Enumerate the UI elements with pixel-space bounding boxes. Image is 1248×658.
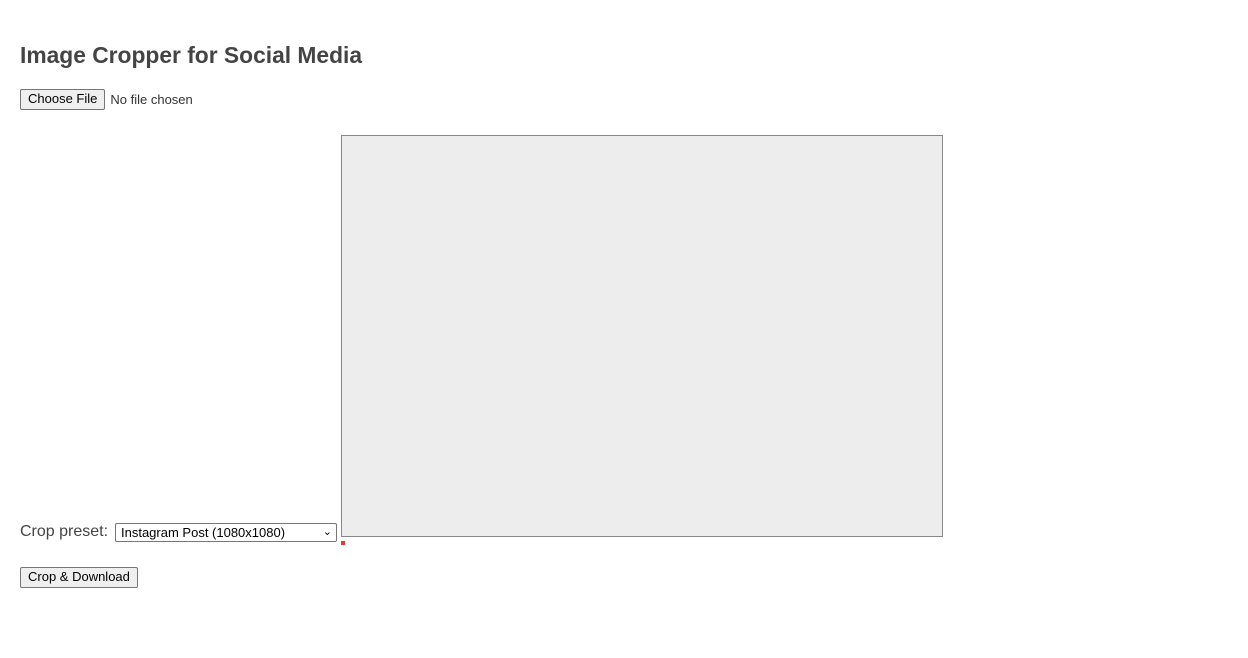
crop handle: [341, 541, 345, 545]
crop preset label: Crop preset:: [20, 523, 108, 540]
crop and download button: Crop & Download: [28, 569, 130, 584]
file input: No file chosen: [110, 92, 193, 107]
preset select: [115, 523, 337, 542]
preset select: Instagram Post (1080x1080): [121, 525, 285, 540]
crop and download button: [20, 567, 138, 588]
file input: [20, 89, 193, 110]
title: Image Cropper for Social Media: [20, 42, 362, 68]
preset select: ⌄: [323, 526, 332, 538]
canvas area: [341, 135, 943, 537]
file input: Choose File: [28, 91, 97, 106]
